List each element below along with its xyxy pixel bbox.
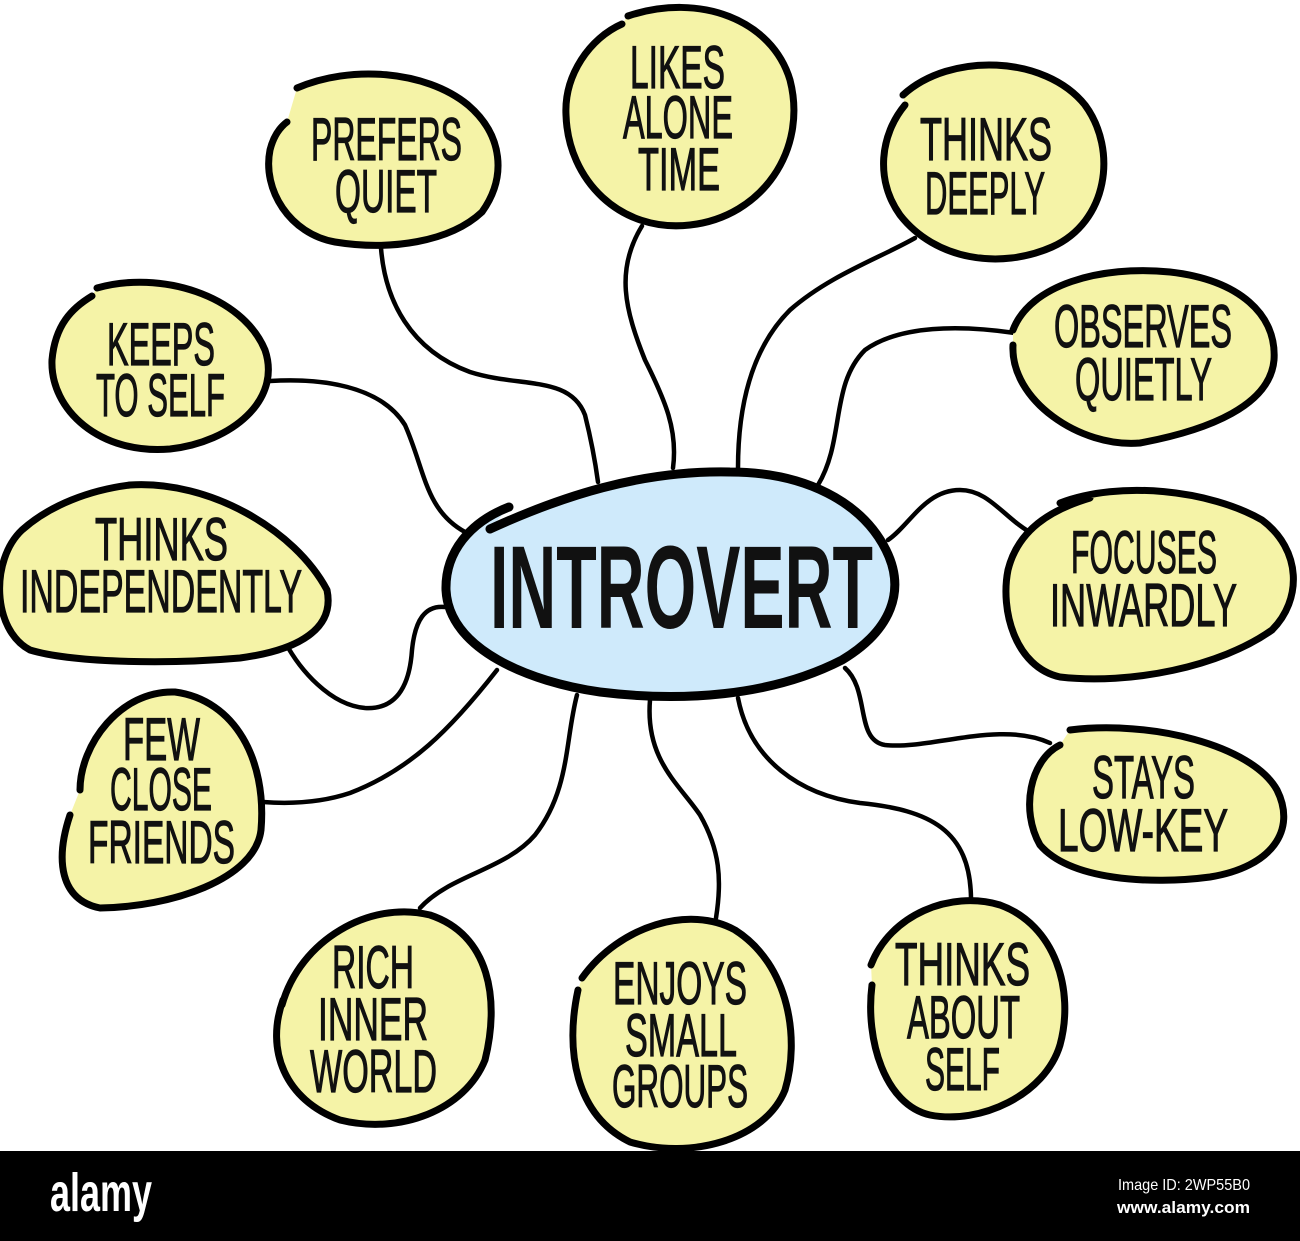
node: few close friends: CLOSE — [110, 756, 212, 823]
node: likes alone time: LIKES — [630, 34, 725, 101]
node: likes alone time — [566, 7, 794, 226]
node: thinks about self: ABOUT — [907, 984, 1020, 1051]
node: prefers quiet: PREFERS — [311, 106, 462, 173]
node: enjoys small groups: GROUPS — [612, 1053, 748, 1120]
node: thinks deeply: DEEPLY — [925, 160, 1045, 227]
node: prefers quiet: QUIET — [335, 158, 437, 225]
node: thinks deeply — [884, 65, 1104, 259]
node: few close friends: FEW — [123, 706, 200, 773]
node: thinks independently — [0, 485, 328, 662]
node: thinks independently: INDEPENDENTLY — [20, 558, 302, 625]
connector: likes alone time — [626, 226, 674, 468]
connector: observes quietly — [818, 328, 1015, 485]
central node: introvert — [446, 472, 895, 697]
node: enjoys small groups — [573, 919, 791, 1149]
connector: keeps to self — [270, 380, 465, 532]
connector: thinks deeply — [738, 238, 915, 468]
footer image id: Image ID: 2WP55B0 — [1118, 1177, 1250, 1194]
node: keeps to self: TO SELF — [96, 362, 225, 429]
node: keeps to self — [52, 282, 268, 450]
node: keeps to self: KEEPS — [107, 311, 215, 378]
connector: prefers quiet — [381, 248, 598, 482]
node: rich inner world: RICH — [332, 934, 414, 1001]
footer url: www.alamy.com — [1116, 1198, 1250, 1217]
node: few close friends: FRIENDS — [88, 809, 235, 876]
connector: rich inner world — [420, 695, 577, 908]
connector: focuses inwardly — [888, 490, 1035, 540]
node: rich inner world: INNER — [318, 986, 428, 1053]
node: thinks independently: THINKS — [95, 506, 228, 573]
connector: enjoys small groups — [650, 700, 719, 918]
footer logo: alamy — [50, 1163, 152, 1223]
node: likes alone time: TIME — [638, 136, 720, 203]
footer band — [0, 1151, 1300, 1241]
central node: introvert: INTROVERT — [490, 522, 873, 654]
node: few close friends — [62, 692, 262, 908]
node: rich inner world: WORLD — [310, 1038, 437, 1105]
connector: thinks independently — [285, 607, 445, 708]
connector: thinks about self — [738, 698, 971, 898]
node: stays low-key — [1030, 728, 1284, 880]
node: enjoys small groups: SMALL — [625, 1002, 737, 1069]
node: thinks about self — [871, 901, 1065, 1117]
node: prefers quiet — [269, 74, 498, 245]
node: likes alone time: ALONE — [623, 84, 733, 151]
node: rich inner world — [277, 912, 491, 1124]
connector: stays low-key — [845, 668, 1050, 746]
node: stays low-key: STAYS — [1092, 744, 1195, 811]
node: thinks about self: THINKS — [895, 931, 1030, 998]
node: thinks deeply: THINKS — [920, 106, 1052, 173]
node: enjoys small groups: ENJOYS — [613, 950, 747, 1017]
node: thinks about self: SELF — [925, 1036, 1000, 1103]
node: observes quietly — [1013, 271, 1274, 443]
node: focuses inwardly — [1006, 490, 1293, 679]
connector: few close friends — [263, 670, 497, 803]
